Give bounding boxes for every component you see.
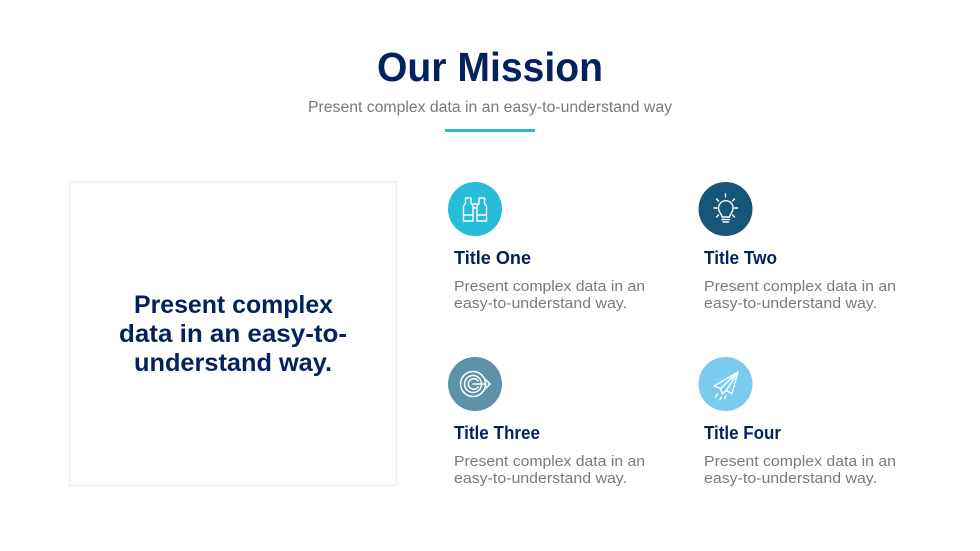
item: title three (448, 357, 645, 487)
heading: Title One (454, 248, 531, 268)
icon: light bulb (698, 182, 752, 236)
description: easy-to-understand way. (454, 295, 627, 312)
description: easy-to-understand way. (704, 295, 877, 312)
description: easy-to-understand way. (454, 470, 627, 487)
description: Present complex data in an (704, 453, 896, 470)
item: title four (698, 357, 896, 487)
icon: target with arrow (448, 357, 502, 411)
heading: Title Two (704, 248, 777, 268)
title accent underline (445, 129, 535, 132)
heading: Title Four (704, 423, 781, 443)
icon: paper plane (698, 357, 752, 411)
description (454, 453, 645, 487)
heading: Title Three (454, 423, 540, 443)
description: easy-to-understand way. (704, 470, 877, 487)
subtitle: Present complex data in an easy-to-understand way (308, 99, 672, 116)
description (704, 453, 896, 487)
panel: main statement (70, 182, 396, 486)
main statement text: Present complex (134, 291, 333, 319)
main statement text: data in an easy-to- (119, 320, 347, 348)
item: title one (448, 182, 645, 312)
icon: binoculars (448, 182, 502, 236)
main statement text (119, 291, 347, 377)
description: Present complex data in an (454, 453, 645, 470)
description (454, 278, 645, 312)
description: Present complex data in an (454, 278, 645, 295)
title: Our Mission (377, 44, 603, 90)
description (704, 278, 896, 312)
item: title two (698, 182, 896, 312)
description: Present complex data in an (704, 278, 896, 295)
main statement text: understand way. (134, 349, 332, 377)
